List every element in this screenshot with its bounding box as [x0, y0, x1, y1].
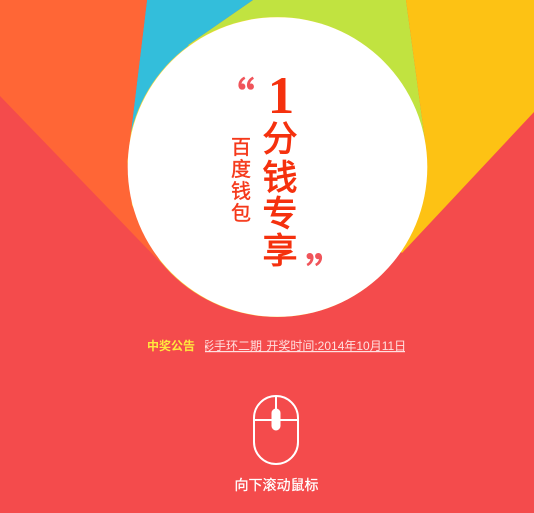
notice label: 中奖公告 — [147, 338, 195, 353]
headline: 分钱专享: 享 — [262, 232, 298, 271]
subheading: 百度钱包: 百 — [231, 137, 251, 159]
notice ticker: 彩手环二期 开奖时间:2014年10月11日 — [202, 339, 406, 353]
white circle — [128, 17, 427, 317]
headline: 分钱专享 — [262, 120, 298, 271]
subheading: 百度钱包: 包 — [231, 202, 251, 225]
subheading: 百度钱包: 钱 — [231, 180, 251, 203]
headline: 分钱专享: 专 — [262, 195, 298, 234]
ray: green — [188, 0, 425, 167]
numeral 1: 1 — [268, 67, 294, 125]
ray: blue — [127, 0, 277, 167]
closing quote: ” — [306, 241, 348, 302]
ray: yellow — [300, 0, 534, 253]
headline: 分钱专享: 钱 — [262, 159, 298, 198]
subheading: 百度钱包: 度 — [231, 158, 251, 181]
ray: orange — [0, 0, 161, 263]
subheading: 百度钱包 — [231, 137, 251, 225]
headline: 分钱专享: 分 — [262, 120, 298, 159]
scroll hint: 向下滚动鼠标 — [234, 477, 318, 493]
sliver: yellow rim of circle — [127, 17, 427, 317]
opening quote: “ — [213, 65, 255, 126]
icon: mouse — [254, 396, 298, 464]
